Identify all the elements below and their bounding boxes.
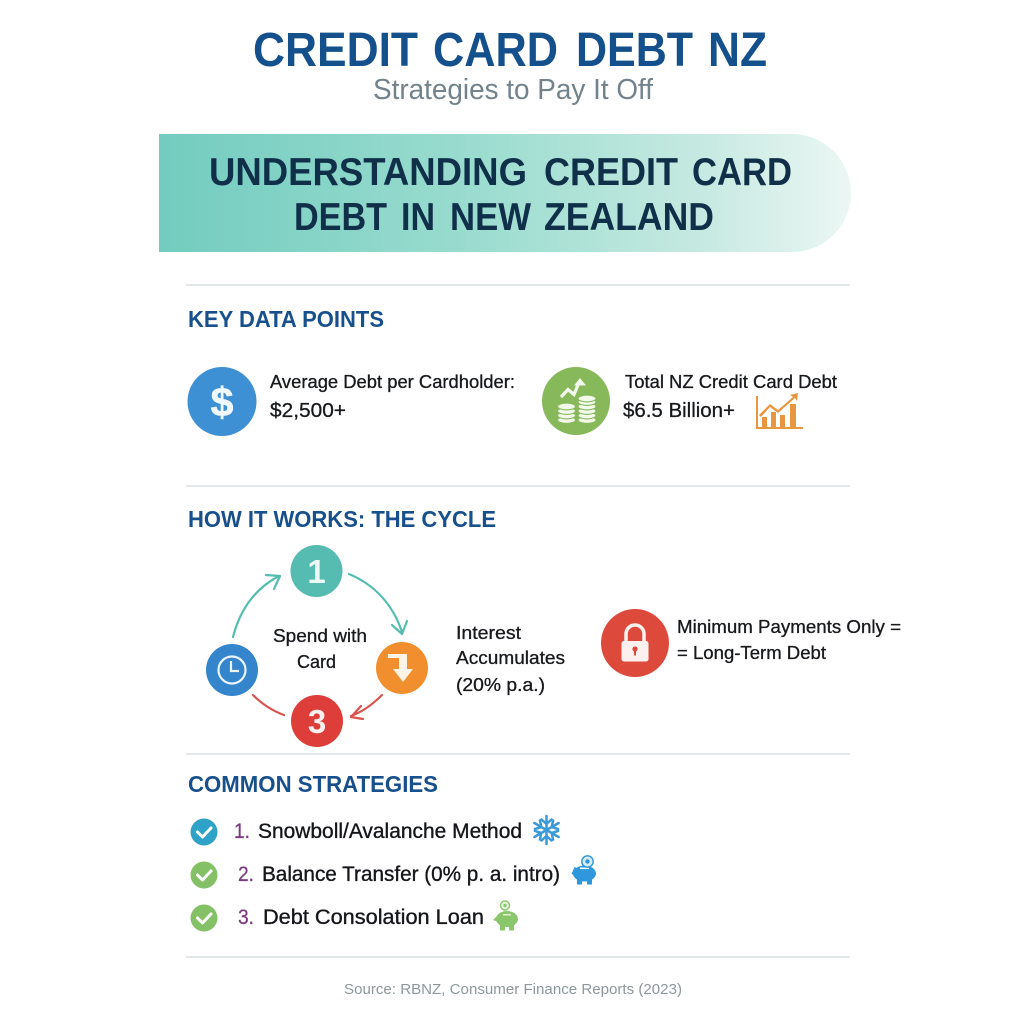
stat: average debt: Average Debt per Cardholder:: [270, 372, 515, 392]
cycle centre label: Spend with: [273, 626, 367, 646]
title: DEBT: [576, 24, 693, 77]
step 3 circle: [291, 695, 343, 747]
callout: minimum payments: [677, 617, 901, 663]
heading: common strategies: COMMON STRATEGIES: [188, 771, 438, 797]
title: [253, 24, 767, 77]
heading: the cycle: HOW IT WORKS: THE CYCLE: [188, 506, 496, 532]
strategy 3: [190, 904, 484, 932]
banner heading: DEBT: [294, 196, 387, 239]
cycle centre label: Card: [297, 652, 336, 672]
strategy 1: 1.: [234, 820, 250, 843]
arrow: step 3 to clock: [253, 695, 284, 715]
icon: green piggy bank: [493, 901, 518, 930]
stat: total debt: $6.5 Billion+: [623, 400, 735, 422]
banner heading: ZEALAND: [544, 196, 714, 239]
icon: orange growth chart: [756, 393, 803, 429]
title: CARD: [433, 24, 558, 77]
icon: orange step down arrow: [376, 642, 428, 694]
strategy 2: 2.: [238, 863, 254, 886]
title: CREDIT: [253, 24, 418, 77]
arrow: clock to step 1: [233, 575, 280, 637]
banner heading: CARD: [692, 151, 792, 194]
stat: average debt: $2,500+: [270, 400, 346, 422]
strategy 2: [190, 862, 560, 888]
banner heading: UNDERSTANDING: [209, 151, 527, 194]
arrow: orange to step 3: [351, 695, 382, 719]
icon: blue piggy bank: [572, 856, 596, 884]
icon: snowflake: [532, 816, 561, 844]
panel: how it works cycle: [188, 506, 901, 747]
cycle centre label: [273, 626, 367, 672]
title: NZ: [708, 24, 767, 77]
heading: key data points: KEY DATA POINTS: [188, 306, 384, 332]
banner heading: [209, 151, 792, 239]
text: interest accumulates: Interest: [456, 623, 521, 643]
icon: padlock: [601, 609, 669, 677]
stat: total debt: [623, 372, 837, 422]
arrow: step 1 to orange: [349, 574, 407, 634]
icon: clock: [206, 644, 258, 696]
text: interest accumulates: Accumulates: [456, 648, 565, 668]
panel: key data points: [188, 306, 837, 436]
strategy 1: [190, 818, 522, 846]
panel: banner: [159, 134, 851, 252]
icon: coins and arrow: [542, 367, 610, 435]
banner heading: IN: [401, 196, 435, 239]
source note: Source: RBNZ, Consumer Finance Reports (2023): [344, 981, 682, 998]
callout: minimum payments: Minimum Payments Only =: [677, 617, 901, 637]
strategy 3: Debt Consolation Loan: [263, 906, 484, 929]
strategy 2: Balance Transfer (0% p. a. intro): [262, 863, 560, 886]
banner heading: NEW: [450, 196, 531, 239]
strategy 3: 3.: [238, 906, 254, 929]
stat: total debt: Total NZ Credit Card Debt: [625, 372, 837, 392]
strategy 1: Snowboll/Avalanche Method: [258, 820, 522, 843]
text: interest accumulates: [456, 623, 565, 695]
callout: minimum payments: = Long-Term Debt: [677, 643, 826, 663]
subtitle: Strategies to Pay It Off: [373, 74, 654, 106]
banner heading: CREDIT: [544, 151, 678, 194]
stat: average debt: [270, 372, 515, 422]
icon: dollar: [188, 367, 256, 436]
text: interest accumulates: (20% p.a.): [456, 675, 545, 695]
step 3 circle: 3: [308, 703, 326, 740]
step 1 circle: [290, 545, 342, 597]
panel: common strategies: [188, 771, 596, 932]
step 1 circle: 1: [307, 553, 326, 590]
icon: dollar: $: [211, 379, 234, 425]
